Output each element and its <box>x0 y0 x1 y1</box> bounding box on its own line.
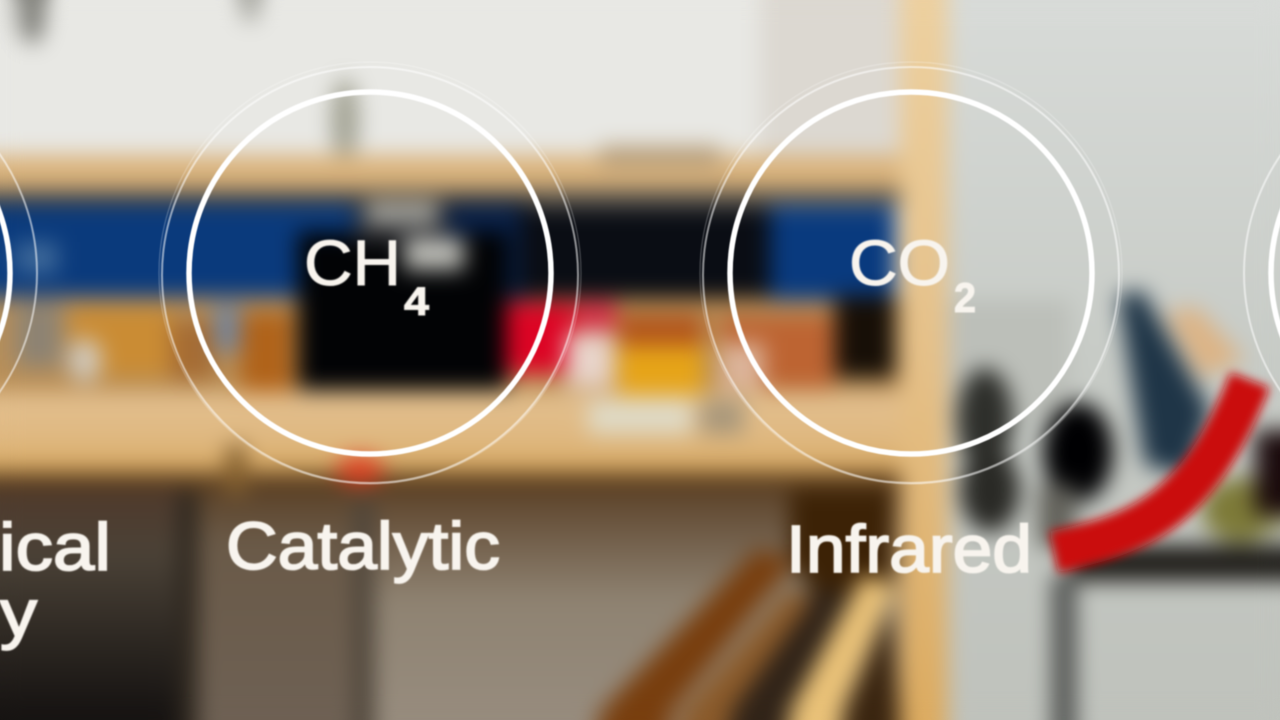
ring: methane sensor <box>159 62 581 484</box>
ring: right sensor, cropped <box>1244 65 1280 481</box>
formula: CH4 <box>304 227 430 324</box>
label: left sensor, cropped <box>0 510 111 651</box>
label: left sensor, cropped: y <box>0 576 38 651</box>
formula: CO2 <box>849 227 976 321</box>
label: Catalytic: Catalytic <box>226 509 500 584</box>
ring: carbon dioxide sensor <box>700 62 1122 484</box>
formula: CH4: 4 <box>404 280 430 324</box>
label: left sensor, cropped: ical <box>0 510 111 585</box>
formula: CO2: CO <box>849 227 950 299</box>
formula: CH4: CH <box>304 227 401 299</box>
ring: left sensor, cropped <box>0 65 37 481</box>
label: Infrared: Infrared <box>786 512 1032 587</box>
formula: CO2: 2 <box>954 274 976 321</box>
